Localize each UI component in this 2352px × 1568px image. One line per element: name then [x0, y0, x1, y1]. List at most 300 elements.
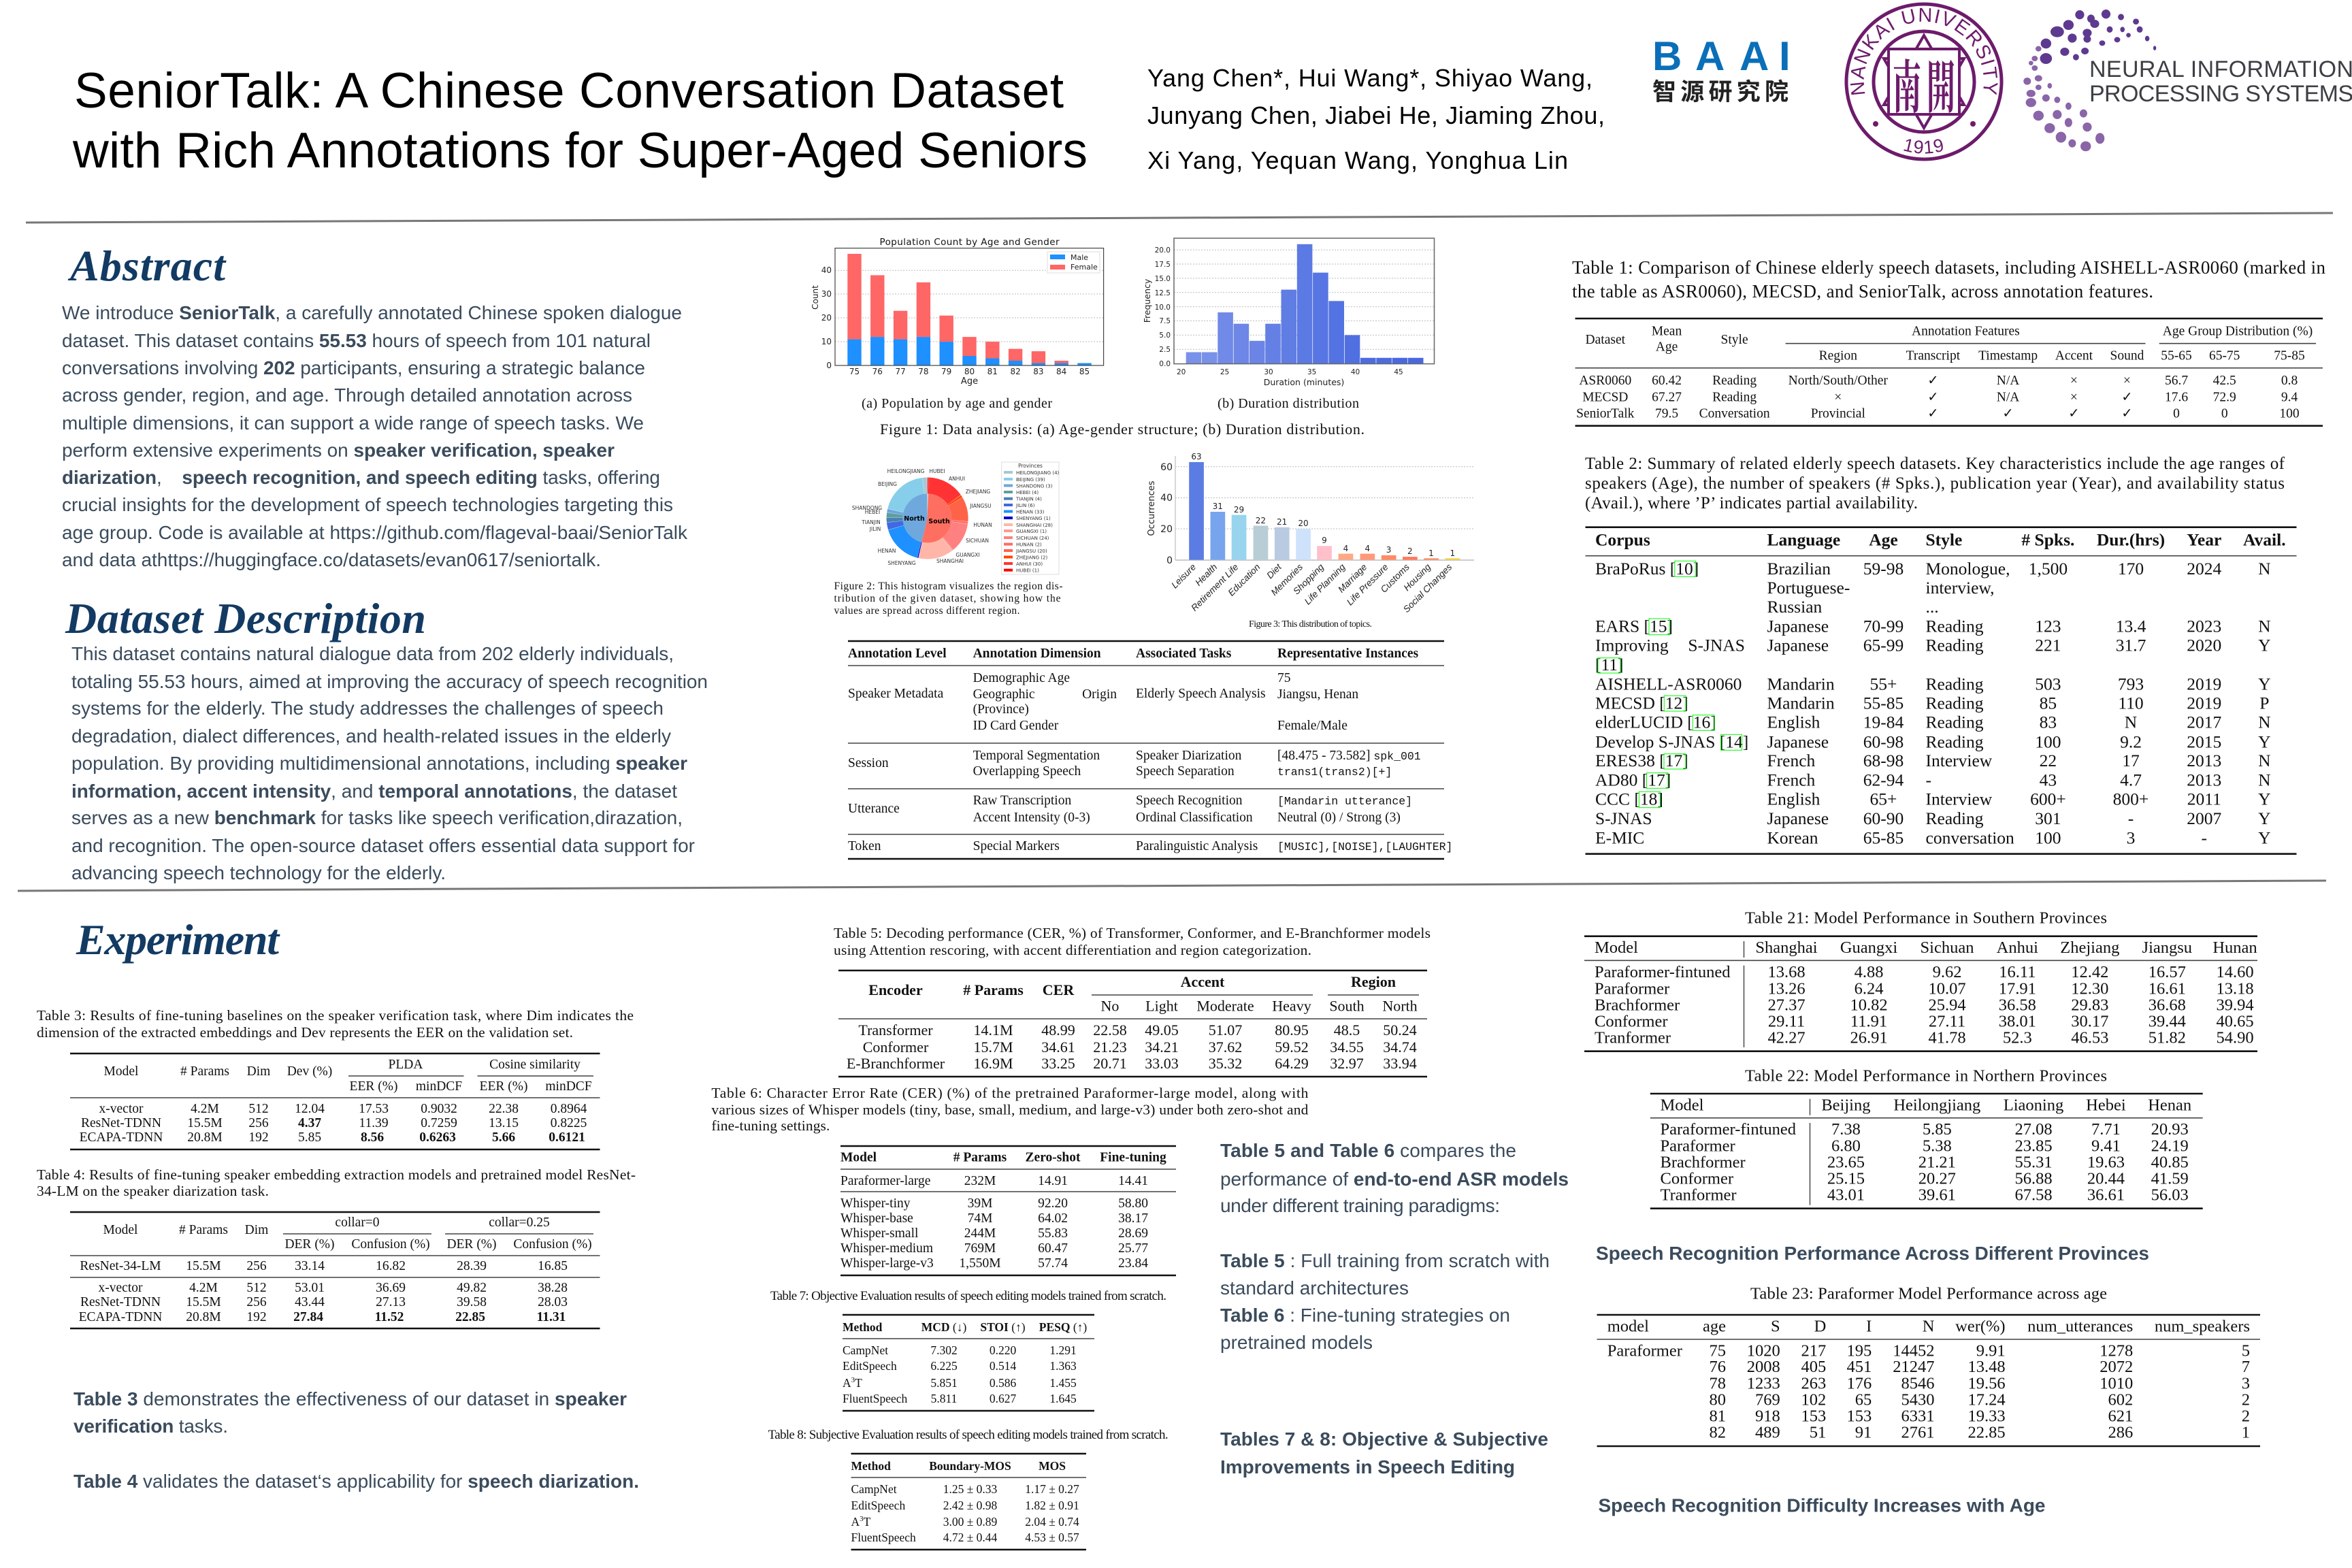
figure 3: topic distribution bar chart: 1	[1428, 549, 1434, 558]
table 3 caption: dimension of the extracted embeddings and Dev represents the EER on the validation set.	[37, 1024, 573, 1041]
table: annotation levels: Speech Separation	[1136, 764, 1235, 779]
table 4: speaker diarization: ECAPA-TDNN	[79, 1310, 162, 1324]
figure 3: topic distribution bar chart: 0	[1166, 555, 1173, 566]
heading: experiment: Experiment	[76, 915, 280, 964]
figure 1 captions: (a) Population by age and gender	[862, 396, 1052, 411]
table 2: related datasets: English	[1767, 789, 1820, 809]
province legend: HEILONGJIANG (4)	[1016, 470, 1060, 476]
table: annotation levels: [MUSIC],[NOISE],[LAUGHTER]	[1277, 840, 1452, 853]
table 23: performance across age: num_utterances	[2027, 1318, 2133, 1336]
table 2: related datasets: Improving	[1595, 636, 1669, 655]
figure 2: region donut chart: HUBEI	[929, 468, 945, 474]
table: annotation levels: Elderly Speech Analysis	[1136, 687, 1266, 701]
table 6 caption: various sizes of Whisper models (tiny, base, small, medium, and large-v3) under both zero-shot and	[711, 1102, 1309, 1118]
table 2: related datasets: Mandarin	[1767, 693, 1835, 713]
table 2: related datasets: -	[2128, 808, 2134, 828]
table 22: northern provinces: 56.88	[2014, 1169, 2053, 1188]
dataset description body text: This dataset contains natural dialogue data from 202 elderly individuals,	[71, 643, 674, 664]
figure 1b: duration distribution: 20.0	[1155, 246, 1171, 255]
table 6: character error rate: 14.91	[1038, 1174, 1068, 1188]
figure 3: topic distribution bar chart: 4	[1343, 544, 1348, 553]
table 22: northern provinces: Paraformer-fintuned	[1661, 1120, 1796, 1139]
province legend	[1002, 462, 1060, 574]
table: annotation levels: trans1(trans2)[+]	[1277, 766, 1392, 779]
province legend: HUNAN (2)	[1016, 542, 1042, 548]
abstract body text: crucial insights for the development of speech technologies targeting this	[62, 494, 673, 515]
table 1 caption: the table as ASR0060), MECSD, and SeniorTalk, across annotation features.	[1572, 281, 2153, 301]
callout: tables 5 and 6: standard architectures	[1220, 1277, 1409, 1298]
table 21: southern provinces: 38.01	[1999, 1012, 2036, 1030]
table 1: dataset comparison: 42.5	[2213, 374, 2236, 388]
table 2: related datasets: Dur.(hrs)	[2097, 530, 2165, 550]
table 22: northern provinces: 20.93	[2151, 1120, 2189, 1139]
table 22: northern provinces: 27.08	[2014, 1120, 2053, 1139]
figure 2 caption: Figure 2: This histogram visualizes the region dis-	[834, 581, 1063, 592]
table 2: related datasets: 55-85	[1863, 693, 1904, 713]
table: annotation levels	[848, 641, 1452, 859]
table 21: southern provinces: 51.82	[2149, 1028, 2186, 1047]
table 23: performance across age: 286	[2108, 1424, 2133, 1442]
callout: tables 7 and 8: Improvements in Speech Editing	[1220, 1456, 1515, 1477]
dataset description body text: advancing speech technology for the elderly.	[71, 862, 446, 883]
table 4: speaker diarization: 53.01	[295, 1281, 325, 1295]
figure 1a: population by age and gender: 0	[826, 361, 832, 370]
table 5: decoding performance: Accent	[1181, 973, 1225, 990]
table 1: dataset comparison: ✓	[1927, 405, 1939, 421]
table: annotation levels: ID Card Gender	[973, 719, 1059, 733]
table 1: dataset comparison: Timestamp	[1978, 348, 2038, 363]
table: annotation levels: Speaker Metadata	[848, 687, 944, 701]
table 3: speaker verification: 0.8964	[551, 1102, 587, 1116]
table 2: related datasets: 2023	[2187, 616, 2221, 636]
table 23: performance across age: 14452	[1893, 1341, 1934, 1360]
figure 3: topic distribution bar chart: 31	[1213, 502, 1223, 511]
table 23: performance across age: 195	[1847, 1341, 1872, 1360]
figure 3: topic distribution bar chart: Shopping	[1291, 561, 1326, 596]
table 2: related datasets: Y	[2258, 636, 2271, 655]
table: annotation levels: Geographic	[973, 687, 1035, 702]
table 4: speaker diarization: 20.8M	[186, 1310, 221, 1324]
table 21: southern provinces: 36.68	[2149, 996, 2186, 1014]
table 2: related datasets: English	[1767, 712, 1820, 732]
figure 1b: duration distribution: 17.5	[1155, 261, 1171, 269]
authors: Xi Yang, Yequan Wang, Yonghua Lin	[1147, 146, 1568, 174]
table: annotation levels: Utterance	[848, 802, 900, 816]
table 7: objective evaluation: FluentSpeech	[843, 1392, 908, 1405]
table 2: related datasets: Japanese	[1767, 808, 1829, 828]
figure 3: topic distribution bar chart: Health	[1193, 562, 1219, 588]
table 4: speaker diarization: Dim	[245, 1223, 268, 1237]
table 22: northern provinces: 7.38	[1831, 1120, 1861, 1139]
table 8: subjective evaluation: 2.04 ± 0.74	[1025, 1515, 1079, 1529]
table 5: decoding performance: North	[1382, 998, 1418, 1014]
table 4: speaker diarization: Model	[103, 1223, 138, 1237]
table 1: dataset comparison: ×	[1834, 390, 1842, 404]
logo: Nankai University: 南	[1893, 42, 1921, 124]
table 21: southern provinces: Model	[1595, 938, 1638, 957]
table 23: performance across age	[1597, 1315, 2260, 1446]
abstract body text: and data athttps://huggingface.co/datasets/evan0617/seniortalk.	[62, 549, 601, 570]
table 5 caption: using Attention rescoring, with accent differentiation and region categorization.	[834, 942, 1311, 958]
table 5: decoding performance: 33.94	[1383, 1055, 1417, 1072]
figure 3: topic distribution bar chart: 60	[1160, 462, 1173, 473]
table 23: performance across age: I	[1866, 1318, 1872, 1336]
table 8: subjective evaluation	[851, 1454, 1086, 1550]
province legend: HENAN (33)	[1016, 509, 1045, 514]
table 23: performance across age: 78	[1710, 1375, 1726, 1393]
figure 1b: duration distribution: 10.0	[1155, 304, 1171, 312]
figure 1b: duration distribution: 45	[1394, 368, 1403, 376]
table 5: decoding performance: 48.5	[1334, 1022, 1360, 1039]
province legend: JILIN (6)	[1015, 503, 1035, 508]
figure 2: region donut chart: ANHUI	[949, 476, 965, 482]
table 1: dataset comparison: Conversation	[1699, 406, 1770, 421]
figure 1b: duration distribution: 5.0	[1159, 331, 1171, 340]
figure 1a: population by age and gender: 84	[1056, 367, 1066, 376]
table 5: decoding performance: 14.1M	[973, 1022, 1013, 1039]
table 2: related datasets: 1,500	[2029, 559, 2068, 578]
table 23: performance across age: 405	[1801, 1358, 1826, 1376]
table 4: speaker diarization: 38.28	[538, 1281, 568, 1295]
table 4 caption: Table 4: Results of fine-tuning speaker embedding extraction models and pretrained model ResNet-	[37, 1166, 636, 1183]
table: annotation levels: Token	[848, 839, 881, 853]
figure 3: topic distribution bar chart: Customs	[1379, 561, 1411, 595]
table 3: speaker verification: 22.38	[489, 1102, 519, 1116]
figure 1b: duration distribution: 30	[1264, 368, 1273, 376]
figure 1b: duration distribution: 20	[1177, 368, 1186, 376]
table 1: dataset comparison: 9.4	[2281, 390, 2298, 404]
figure 3: topic distribution bar chart: 9	[1322, 536, 1327, 545]
table 23: performance across age: 13.48	[1967, 1358, 2006, 1376]
figure 3: topic distribution bar chart: Marriage	[1336, 562, 1369, 595]
table 1: dataset comparison: 56.7	[2165, 374, 2188, 388]
table 3: speaker verification: Dim	[247, 1064, 270, 1079]
table 8: subjective evaluation: 1.17 ± 0.27	[1025, 1482, 1079, 1496]
table 1: dataset comparison: Accent	[2055, 348, 2093, 363]
table 7: objective evaluation: 0.514	[990, 1359, 1016, 1373]
table 8 caption: Table 8: Subjective Evaluation results of speech editing models trained from scratch.	[768, 1428, 1169, 1442]
table 7: objective evaluation: Method	[843, 1320, 883, 1334]
figure 1a: population by age and gender: 40	[821, 265, 832, 275]
table 2: related datasets: 503	[2035, 674, 2061, 693]
table 5: decoding performance: E-Branchformer	[847, 1055, 945, 1072]
callout: tables 5 and 6	[1220, 1140, 1569, 1353]
table 1: dataset comparison: Region	[1819, 348, 1857, 363]
table 23: performance across age: 91	[1855, 1424, 1872, 1442]
table 21: southern provinces: Anhui	[1997, 938, 2038, 957]
table 22: northern provinces: 5.85	[1923, 1120, 1952, 1139]
table 2: related datasets: Interview	[1926, 789, 1993, 809]
table 2: related datasets: 85	[2040, 693, 2057, 713]
table 3: speaker verification: Model	[104, 1064, 139, 1079]
table 22: northern provinces: 40.85	[2151, 1153, 2189, 1171]
table 1: dataset comparison: 72.9	[2213, 390, 2236, 404]
table 4: speaker diarization: 28.39	[457, 1259, 487, 1273]
table 4 caption	[37, 1166, 636, 1199]
table 6: character error rate: Whisper-base	[840, 1211, 913, 1226]
table 1: dataset comparison: 17.6	[2165, 390, 2188, 404]
table 4: speaker diarization: 256	[246, 1295, 267, 1309]
table: annotation levels: Ordinal Classification	[1136, 811, 1253, 825]
province legend: TIANJIN (4)	[1015, 497, 1042, 502]
table 21: southern provinces: 12.30	[2071, 979, 2108, 998]
table 2: related datasets: 221	[2035, 636, 2061, 655]
figure 3: topic distribution bar chart: Life Pressure	[1345, 562, 1390, 607]
table 21: southern provinces: 16.11	[1999, 963, 2036, 981]
table 23: performance across age: model	[1607, 1318, 1649, 1336]
table 1: dataset comparison: ×	[2070, 374, 2078, 388]
table 2: related datasets: -	[1926, 770, 1931, 789]
table 8: subjective evaluation: CampNet	[851, 1482, 897, 1496]
table 23: performance across age: 1020	[1747, 1341, 1780, 1360]
table 3: speaker verification: x-vector	[99, 1102, 144, 1116]
table 21: southern provinces: 42.27	[1767, 1028, 1806, 1047]
table 21: southern provinces: 30.17	[2071, 1012, 2108, 1030]
table 7: objective evaluation: 3	[851, 1376, 855, 1384]
table: annotation levels: Speaker Diarization	[1136, 749, 1242, 763]
table 4: speaker diarization: 39.58	[457, 1295, 487, 1309]
table 8: subjective evaluation: Method	[851, 1459, 891, 1473]
table 22: northern provinces: 23.65	[1827, 1153, 1865, 1171]
table: annotation levels: Special Markers	[973, 839, 1060, 853]
table 23: performance across age: 621	[2108, 1407, 2133, 1426]
table 6: character error rate: 92.20	[1038, 1196, 1068, 1211]
table 2: related datasets: 301	[2035, 808, 2061, 828]
logo: Nankai University: 1919	[1904, 139, 1943, 154]
table 23: performance across age: 1278	[2100, 1341, 2133, 1360]
table 1: dataset comparison: Style	[1721, 333, 1748, 347]
table 6: character error rate: 14.41	[1118, 1174, 1148, 1188]
table 2: related datasets: MECSD [12]	[1595, 693, 1688, 713]
figure 3: topic distribution bar chart: 1	[1450, 549, 1455, 558]
province legend: HUBEI (1)	[1016, 568, 1039, 574]
table 1: dataset comparison: 100	[2279, 406, 2300, 421]
table 22: northern provinces: Conformer	[1661, 1169, 1733, 1188]
figure 1a: population by age and gender: 82	[1010, 367, 1021, 376]
callout: tables 7 and 8	[1220, 1428, 1548, 1477]
table 1: dataset comparison: 0	[2173, 406, 2180, 421]
callout: age: Speech Recognition Difficulty Increases with Age	[1598, 1495, 2046, 1516]
table 2: related datasets: 2011	[2187, 789, 2221, 809]
table 23: performance across age: 451	[1847, 1358, 1872, 1376]
figure 1a: population by age and gender	[811, 237, 1104, 387]
callout: tables 3 and 4: verification tasks.	[74, 1416, 228, 1437]
table 6: character error rate: 28.69	[1118, 1226, 1148, 1241]
table 23: performance across age: 9.91	[1976, 1341, 2006, 1360]
table 7: objective evaluation: STOI (↑)	[980, 1320, 1026, 1334]
table 7: objective evaluation: A	[843, 1376, 851, 1390]
table 5 caption	[834, 925, 1431, 958]
table: annotation levels: Jiangsu, Henan	[1277, 687, 1358, 702]
table 7: objective evaluation: 5.811	[931, 1392, 957, 1405]
table 22 caption: Table 22: Model Performance in Northern Provinces	[1745, 1066, 2107, 1085]
table 21: southern provinces: Guangxi	[1840, 938, 1897, 957]
table 7: objective evaluation: PESQ (↑)	[1039, 1320, 1087, 1334]
figure 1b: duration distribution: Frequency	[1142, 278, 1152, 323]
abstract body text: dataset. This dataset contains 55.53 hours of speech from 101 natural	[62, 330, 651, 351]
figure 1b: duration distribution: Duration (minutes)	[1264, 377, 1344, 387]
figure 1a: population by age and gender: 20	[821, 313, 832, 323]
table 3: speaker verification: EER (%)	[480, 1079, 527, 1094]
table 6: character error rate: # Params	[953, 1151, 1007, 1165]
table 23: performance across age: 602	[2108, 1391, 2133, 1409]
table 5: decoding performance: 50.24	[1383, 1022, 1417, 1039]
table 3: speaker verification: EER (%)	[350, 1079, 397, 1094]
figure 1b: duration distribution	[1142, 238, 1435, 387]
table: annotation levels: Speech Recognition	[1136, 794, 1243, 808]
table 5: decoding performance: 49.05	[1145, 1022, 1179, 1039]
abstract body text: across gender, region, and age. Through detailed annotation across	[62, 385, 632, 406]
table 6: character error rate: Whisper-tiny	[840, 1196, 911, 1211]
province legend: JIANGSU (20)	[1015, 549, 1047, 554]
table 2: related datasets: 3	[2127, 828, 2135, 847]
table 8: subjective evaluation: EditSpeech	[851, 1499, 905, 1512]
table 4: speaker diarization: ResNet-34-LM	[80, 1259, 161, 1273]
table 2: related datasets: 31.7	[2116, 636, 2146, 655]
table 6: character error rate: Paraformer-large	[840, 1174, 930, 1188]
logo: NeurIPS dots	[2023, 10, 2156, 151]
table 6: character error rate: 74M	[968, 1211, 992, 1226]
table 2: related datasets: N	[2125, 712, 2137, 732]
table 23: performance across age: 1	[2242, 1424, 2250, 1442]
table 8: subjective evaluation: 1.25 ± 0.33	[943, 1482, 998, 1496]
figure 2: region donut chart: HEILONGJIANG	[887, 468, 925, 474]
table 3: speaker verification: 192	[248, 1130, 269, 1145]
table 3: speaker verification: ResNet-TDNN	[81, 1116, 161, 1130]
figure 2: region donut chart: SHENYANG	[887, 560, 916, 566]
table 1: dataset comparison: SeniorTalk	[1576, 406, 1635, 421]
table 23: performance across age: D	[1814, 1318, 1826, 1336]
table 7: objective evaluation: 0.220	[990, 1343, 1016, 1357]
heading: abstract: Abstract	[67, 242, 227, 290]
figure 3: topic distribution bar chart	[1147, 452, 1474, 630]
figure 3: topic distribution bar chart: Life Planning	[1303, 561, 1348, 606]
table 6 caption	[711, 1085, 1309, 1134]
figure 2: region donut chart: SHANGHAI	[936, 558, 964, 564]
figure 3: topic distribution bar chart: 3	[1386, 545, 1391, 555]
figure 1a: population by age and gender: 10	[821, 337, 832, 346]
table 2: related datasets: N	[2258, 770, 2271, 789]
table 2: related datasets: Japanese	[1767, 636, 1829, 655]
table 2: related datasets: Corpus	[1595, 530, 1650, 550]
table 2: related datasets: 22	[2040, 751, 2057, 770]
table 21: southern provinces: 13.68	[1767, 963, 1806, 981]
callout: tables 5 and 6: Table 5 and Table 6 compares the	[1220, 1140, 1516, 1161]
table 2 caption: speakers (Age), the number of speakers (# Spks.), publication year (Year), and availability status	[1585, 474, 2285, 493]
table 21: southern provinces: 6.24	[1855, 979, 1883, 998]
table 21 caption: Table 21: Model Performance in Southern Provinces	[1745, 909, 2107, 928]
logo: NeurIPS wordmark: NEURAL INFORMATION	[2089, 56, 2352, 82]
table 23: performance across age: 5430	[1901, 1391, 1934, 1409]
table 5: decoding performance: 80.95	[1275, 1022, 1309, 1039]
figure 1a: population by age and gender: 83	[1033, 367, 1044, 376]
table 22: northern provinces: 41.59	[2151, 1169, 2189, 1188]
table 5: decoding performance: Conformer	[863, 1039, 929, 1056]
logo: NeurIPS wordmark	[2089, 56, 2352, 107]
table 3: speaker verification: 0.9032	[421, 1102, 457, 1116]
table 6: character error rate: Model	[840, 1151, 877, 1165]
table 23: performance across age: 2761	[1901, 1424, 1934, 1442]
table 3: speaker verification: PLDA	[389, 1058, 423, 1072]
table 5: decoding performance: Light	[1145, 998, 1178, 1014]
callout: tables 5 and 6: Table 6 : Fine-tuning strategies on	[1220, 1305, 1510, 1326]
table 2: related datasets: Style	[1926, 530, 1962, 550]
table 7: objective evaluation: 0.586	[990, 1376, 1016, 1390]
table 23: performance across age: 21247	[1893, 1358, 1934, 1376]
authors: Junyang Chen, Jiabei He, Jiaming Zhou,	[1147, 101, 1605, 129]
table: annotation levels: Paralinguistic Analysis	[1136, 839, 1258, 853]
table 4: speaker diarization: Confusion (%)	[351, 1237, 430, 1252]
table 21: southern provinces: Jiangsu	[2142, 938, 2192, 957]
table 23: performance across age: 80	[1710, 1391, 1726, 1409]
table 23: performance across age: 82	[1710, 1424, 1726, 1442]
table 6: character error rate: 64.02	[1038, 1211, 1068, 1226]
table 2: related datasets: 62-94	[1863, 770, 1904, 789]
province legend: ANHUI (30)	[1016, 561, 1043, 567]
table 4: speaker diarization: collar=0	[335, 1215, 380, 1230]
authors: Yang Chen*, Hui Wang*, Shiyao Wang,	[1147, 64, 1592, 92]
table 5: decoding performance: Encoder	[868, 981, 923, 998]
table 2: related datasets: conversation	[1926, 828, 2014, 847]
table: annotation levels: Origin	[1082, 687, 1117, 702]
table 1 caption	[1572, 257, 2326, 301]
table 6: character error rate: Fine-tuning	[1100, 1151, 1166, 1165]
table: annotation levels: Neutral (0) / Strong (3)	[1277, 811, 1401, 825]
table 21: southern provinces: Shanghai	[1755, 938, 1818, 957]
figure 3: topic distribution bar chart: Diet	[1264, 561, 1284, 581]
callout: tables 3 and 4	[74, 1388, 639, 1492]
table 4: speaker diarization: 192	[246, 1310, 267, 1324]
table 5: decoding performance: 51.07	[1209, 1022, 1242, 1039]
table 22: northern provinces: Paraformer	[1661, 1137, 1735, 1155]
table 4: speaker diarization: DER (%)	[284, 1237, 335, 1252]
table 3: speaker verification: minDCF	[545, 1079, 592, 1094]
table 2: related datasets: Y	[2258, 732, 2271, 751]
table 1: dataset comparison: 0.8	[2281, 374, 2298, 388]
table: annotation levels: Annotation Dimension	[973, 647, 1101, 661]
table 5: decoding performance: Transformer	[858, 1022, 933, 1039]
table: annotation levels: 75	[1277, 671, 1290, 685]
table 5: decoding performance: 59.52	[1275, 1039, 1309, 1056]
figure 1a: population by age and gender: 81	[987, 367, 998, 376]
table 2: related datasets: French	[1767, 770, 1816, 789]
table 1: dataset comparison: ×	[2123, 374, 2131, 388]
table 1: dataset comparison: Reading	[1712, 374, 1757, 388]
table 1: dataset comparison: Annotation Features	[1912, 325, 2020, 339]
figure 2: region donut chart: JILIN	[869, 526, 881, 532]
table 4: speaker diarization: # Params	[179, 1223, 228, 1237]
table 4: speaker diarization: 36.69	[376, 1281, 406, 1295]
table 21: southern provinces: 54.90	[2216, 1028, 2254, 1047]
heading: dataset description: Dataset Description	[65, 594, 426, 642]
dataset description body text: totaling 55.53 hours, aimed at improving the accuracy of speech recognition	[71, 671, 708, 692]
table 2 caption: Table 2: Summary of related elderly speech datasets. Key characteristics include the age ranges of	[1585, 455, 2285, 473]
logo: BAAI: 智源研究院	[1652, 73, 1788, 108]
table 2: related datasets: Language	[1767, 530, 1840, 550]
table 2: related datasets: Mandarin	[1767, 674, 1835, 693]
figure 3: topic distribution bar chart: 2	[1407, 546, 1413, 556]
table 2: related datasets: Y	[2258, 674, 2271, 693]
table 8: subjective evaluation: FluentSpeech	[851, 1531, 916, 1544]
table 23: performance across age: age	[1703, 1318, 1726, 1336]
table 7: objective evaluation: MCD (↓)	[921, 1320, 966, 1334]
table 22: northern provinces: 9.41	[2091, 1137, 2121, 1155]
table 1: dataset comparison: 65-75	[2209, 348, 2240, 363]
table 23: performance across age: 7	[2242, 1358, 2250, 1376]
table 22: northern provinces: 25.15	[1827, 1169, 1865, 1188]
table 2: related datasets: N	[2258, 712, 2271, 732]
table 7: objective evaluation	[843, 1315, 1094, 1411]
